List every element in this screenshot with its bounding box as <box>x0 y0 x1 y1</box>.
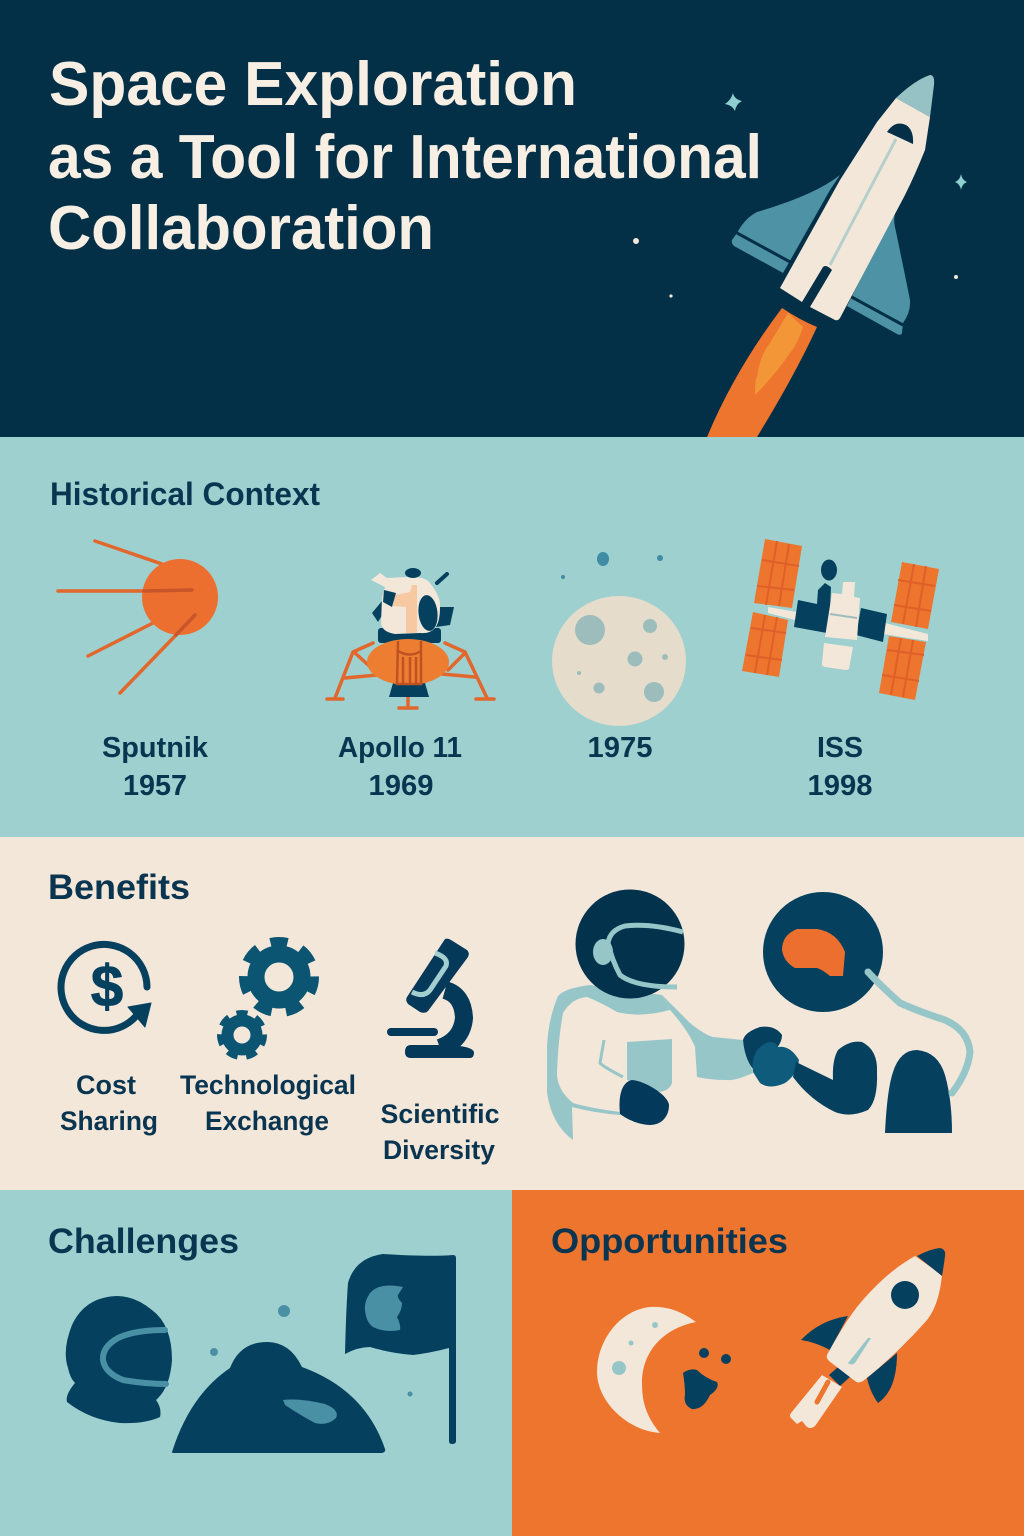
label: technological exchange: Technological <box>180 1070 356 1100</box>
label: iss: ISS <box>817 732 863 764</box>
label: cost sharing <box>60 1070 158 1136</box>
label: technological exchange: Exchange <box>205 1106 329 1136</box>
label: scientific diversity: Scientific <box>380 1099 500 1129</box>
icon: stars <box>633 93 967 298</box>
label: apollo 11: Apollo 11 <box>338 732 462 764</box>
title: as a Tool for International <box>48 123 762 192</box>
label: iss <box>808 732 872 802</box>
panel: header <box>0 0 1024 437</box>
icon: microscope <box>391 939 474 1058</box>
illustration: rocket <box>790 1248 945 1428</box>
panel: opportunities <box>512 1190 1024 1536</box>
icon: apollo lunar module <box>327 568 494 708</box>
icon: gears <box>215 935 321 1062</box>
heading: historical context: Historical Context <box>50 476 320 512</box>
panel: challenges <box>0 1190 512 1536</box>
title: Collaboration <box>48 194 434 263</box>
label: sputnik: 1957 <box>123 770 187 802</box>
label: apollo 11: 1969 <box>368 770 434 802</box>
label: scientific diversity <box>380 1099 500 1165</box>
icon: cost sharing: $ <box>91 954 123 1019</box>
label: apollo 11 <box>338 732 462 802</box>
label: iss: 1998 <box>808 770 872 802</box>
label: sputnik <box>102 732 209 802</box>
heading: opportunities: Opportunities <box>551 1222 788 1261</box>
heading: challenges: Challenges <box>48 1222 239 1261</box>
panel: benefits <box>0 837 1024 1190</box>
icon: sputnik <box>58 541 218 693</box>
illustration: helmet <box>66 1296 172 1423</box>
icon: cost sharing <box>61 944 151 1030</box>
label: scientific diversity: Diversity <box>383 1135 495 1165</box>
label: cost sharing: Cost <box>76 1070 136 1100</box>
illustration: crescent moon <box>597 1307 731 1433</box>
title: Space Exploration <box>49 50 577 119</box>
icon: moon <box>552 552 686 726</box>
panel: historical context <box>0 437 1024 837</box>
label: technological exchange <box>180 1070 356 1136</box>
icon: space shuttle <box>707 75 934 437</box>
heading: benefits: Benefits <box>48 868 190 907</box>
illustration: astronauts shaking hands <box>547 890 970 1140</box>
label: cost sharing: Sharing <box>60 1106 158 1136</box>
icon: international space station <box>742 539 939 700</box>
label: 1975: 1975 <box>588 732 652 764</box>
illustration: mound <box>172 1305 412 1453</box>
label: sputnik: Sputnik <box>102 732 209 764</box>
illustration: flag <box>345 1254 456 1444</box>
title <box>48 50 762 263</box>
